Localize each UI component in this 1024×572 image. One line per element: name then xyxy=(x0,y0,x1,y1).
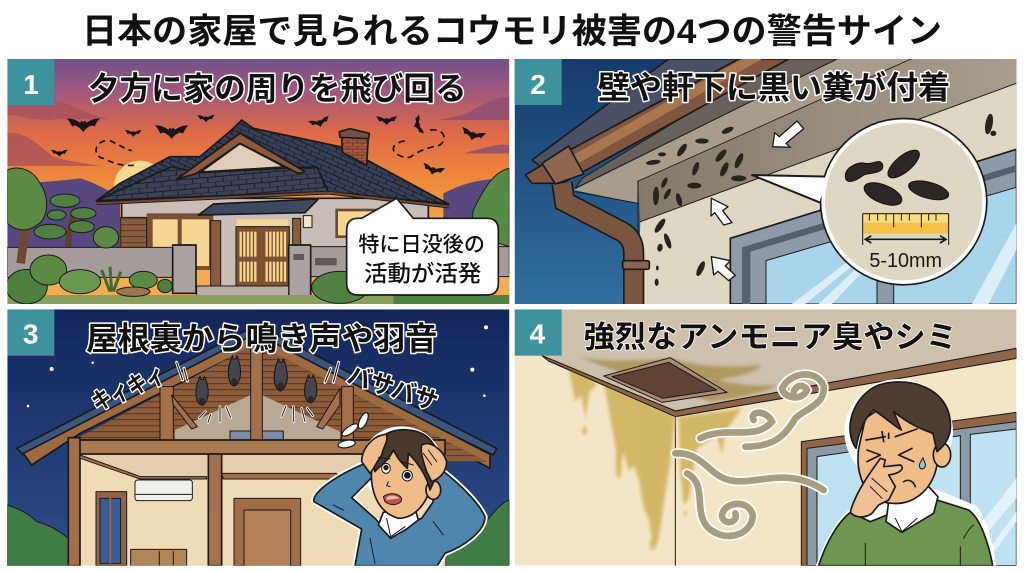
panel 4 heading: 強烈なアンモニア臭やシミ xyxy=(584,321,957,355)
bushes xyxy=(7,500,509,566)
house xyxy=(97,120,449,287)
number badge 4 xyxy=(515,309,562,356)
sweat drop xyxy=(919,458,925,469)
roof, gutter and soffit xyxy=(525,59,912,203)
odor swirls xyxy=(675,374,824,536)
eyes and mouth xyxy=(382,463,390,473)
stains xyxy=(569,357,779,552)
size label: 5-10mm xyxy=(869,249,942,272)
panel 2 heading: 壁や軒下に黒い糞が付着 xyxy=(598,70,950,106)
garden wall and plants xyxy=(6,168,509,305)
number badge 2 xyxy=(515,59,562,105)
house frame xyxy=(17,325,497,566)
callout: most active after sunset xyxy=(347,198,498,295)
hair xyxy=(850,382,951,452)
beige wall xyxy=(575,59,1016,304)
callout: most active after sunset: 特に日没後の xyxy=(358,233,485,256)
attic hatch xyxy=(604,358,727,402)
title: 日本の家屋で見られるコウモリ被害の4つの警告サイン xyxy=(82,13,942,51)
panel 4: ammonia smell and stains xyxy=(515,309,1016,566)
number badge 3 xyxy=(7,309,54,356)
door xyxy=(221,254,236,286)
ceiling xyxy=(515,309,1016,412)
collar xyxy=(378,508,418,538)
number badge 1 xyxy=(7,59,54,105)
closed eyes xyxy=(866,429,917,487)
downspout xyxy=(542,146,649,310)
sound text: flapping: バサバサ xyxy=(344,362,441,416)
sweater xyxy=(314,463,485,566)
windows xyxy=(147,213,213,270)
window frame xyxy=(730,149,1016,304)
door xyxy=(234,498,301,567)
ceiling molding over stains xyxy=(542,348,1016,417)
hand xyxy=(850,458,902,517)
magnifier callout xyxy=(752,118,988,286)
canopy xyxy=(198,199,318,215)
panel 3 heading: 屋根裏から鳴き声や羽音 xyxy=(86,321,437,357)
collar xyxy=(886,487,938,532)
droppings on wall xyxy=(646,113,996,286)
hands xyxy=(362,434,387,473)
number badge 2: 2 xyxy=(530,69,546,100)
sweat marks xyxy=(337,411,370,449)
sound text: squeak: キィキィ xyxy=(88,361,169,417)
worried man xyxy=(314,429,485,566)
hanging bats xyxy=(196,356,317,422)
panel 1: flying around at dusk xyxy=(6,59,509,305)
face xyxy=(370,452,428,520)
man covering nose xyxy=(819,382,994,566)
callout: most active after sunset: 活動が活発 xyxy=(364,261,482,287)
panel 3: noises in attic xyxy=(7,309,509,567)
number badge 3: 3 xyxy=(23,319,38,350)
panel 1 heading: 夕方に家の周りを飛び回る xyxy=(88,71,466,107)
number badge 1: 1 xyxy=(23,69,39,100)
ruler xyxy=(863,214,949,245)
window xyxy=(801,412,1016,566)
small window and box xyxy=(96,492,187,566)
roof xyxy=(97,120,448,204)
face and ear xyxy=(858,405,940,503)
bats xyxy=(51,114,487,178)
sweater xyxy=(819,500,993,566)
number badge 4: 4 xyxy=(530,319,546,350)
chimney xyxy=(342,137,368,165)
stars xyxy=(27,325,488,407)
hair xyxy=(372,430,439,490)
white arrows xyxy=(711,121,804,281)
panel 2: droppings on wall xyxy=(515,59,1016,310)
air conditioner xyxy=(135,480,192,501)
